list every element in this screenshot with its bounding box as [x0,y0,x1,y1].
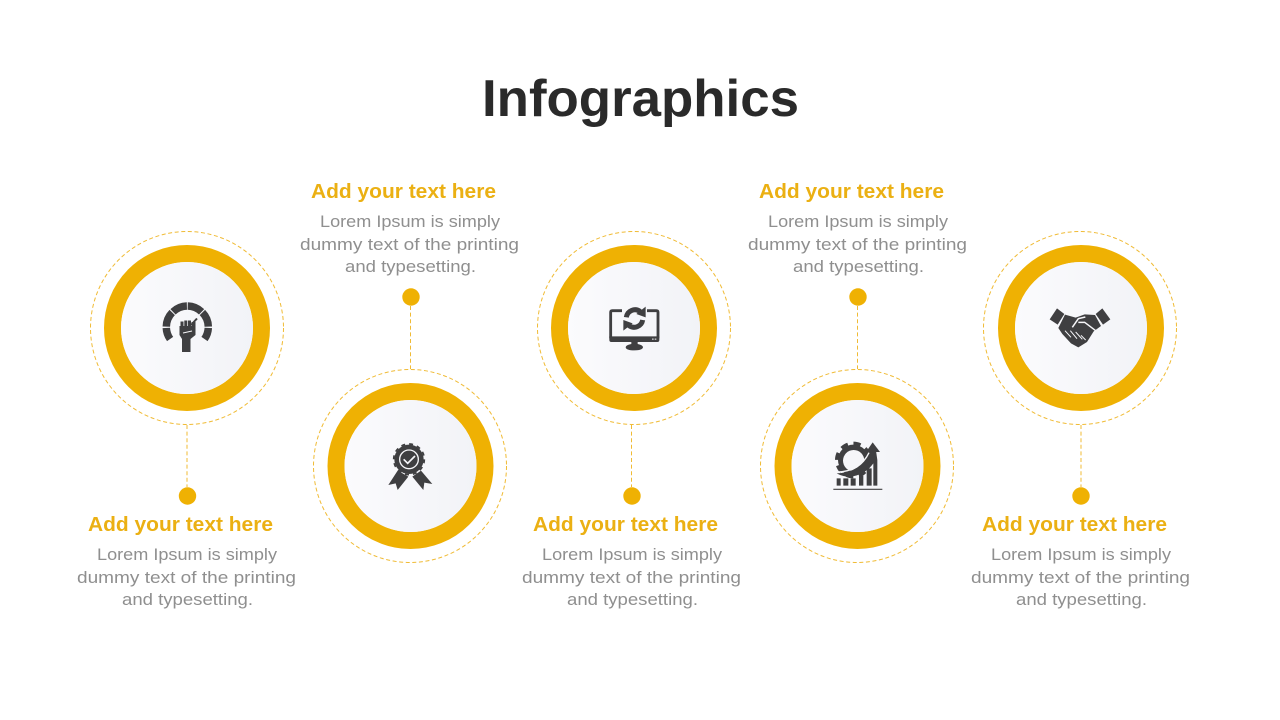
text: step 4: and typesetting. [793,257,924,276]
text: step 4: dummy text of the printing [748,235,967,254]
text: step 5: and typesetting. [1016,590,1147,609]
title: Infographics [482,70,799,128]
dot: step 2 [402,288,420,306]
panel: step 2 [300,181,519,562]
text: step 4 [748,212,967,276]
text: step 1: and typesetting. [122,590,253,609]
dot: step 5 [1072,487,1090,505]
circle: step 3 [538,232,730,424]
dot: step 3 [623,487,641,505]
connector: step 2 [410,306,412,369]
text: step 3: dummy text of the printing [522,568,741,587]
connector: step 1 [186,425,188,487]
heading: step 3: Add your text here [533,514,718,536]
icon: award ribbon [388,444,432,490]
icon: fist and gauge [166,306,208,352]
text: step 3: and typesetting. [567,590,698,609]
text: step 5: Lorem Ipsum is simply [991,545,1172,564]
connector: step 5 [1080,425,1082,487]
text: step 4: Lorem Ipsum is simply [768,212,949,231]
heading: step 1: Add your text here [88,514,273,536]
connector: step 3 [630,425,632,487]
text: step 2: dummy text of the printing [300,235,519,254]
circle: step 4 [760,370,954,562]
dot: step 4 [849,288,867,306]
text: step 1: dummy text of the printing [77,568,296,587]
circle: step 1 [90,232,284,424]
icon: monitor with sync arrows [609,307,659,350]
circle: step 5 [984,232,1176,424]
heading: step 4: Add your text here [759,181,944,203]
heading: step 2: Add your text here [311,181,496,203]
circle: step 2 [314,370,506,562]
text: step 2: Lorem Ipsum is simply [320,212,501,231]
text: step 3: Lorem Ipsum is simply [542,545,723,564]
panel: step 5 [971,232,1190,609]
text: step 3 [522,545,741,609]
dot: step 1 [179,487,196,505]
connector: step 4 [856,306,858,369]
text: step 5 [971,545,1190,609]
panel: step 4 [748,181,967,562]
icon: handshake [1050,308,1110,347]
text: step 2: and typesetting. [345,257,476,276]
text: step 2 [300,212,519,276]
heading: step 5: Add your text here [982,514,1167,536]
text: step 1: Lorem Ipsum is simply [97,545,278,564]
panel: step 1 [77,232,296,609]
text: step 1 [77,545,296,609]
text: step 5: dummy text of the printing [971,568,1190,587]
icon: gear with growth chart [833,442,882,489]
panel: step 3 [522,232,741,609]
